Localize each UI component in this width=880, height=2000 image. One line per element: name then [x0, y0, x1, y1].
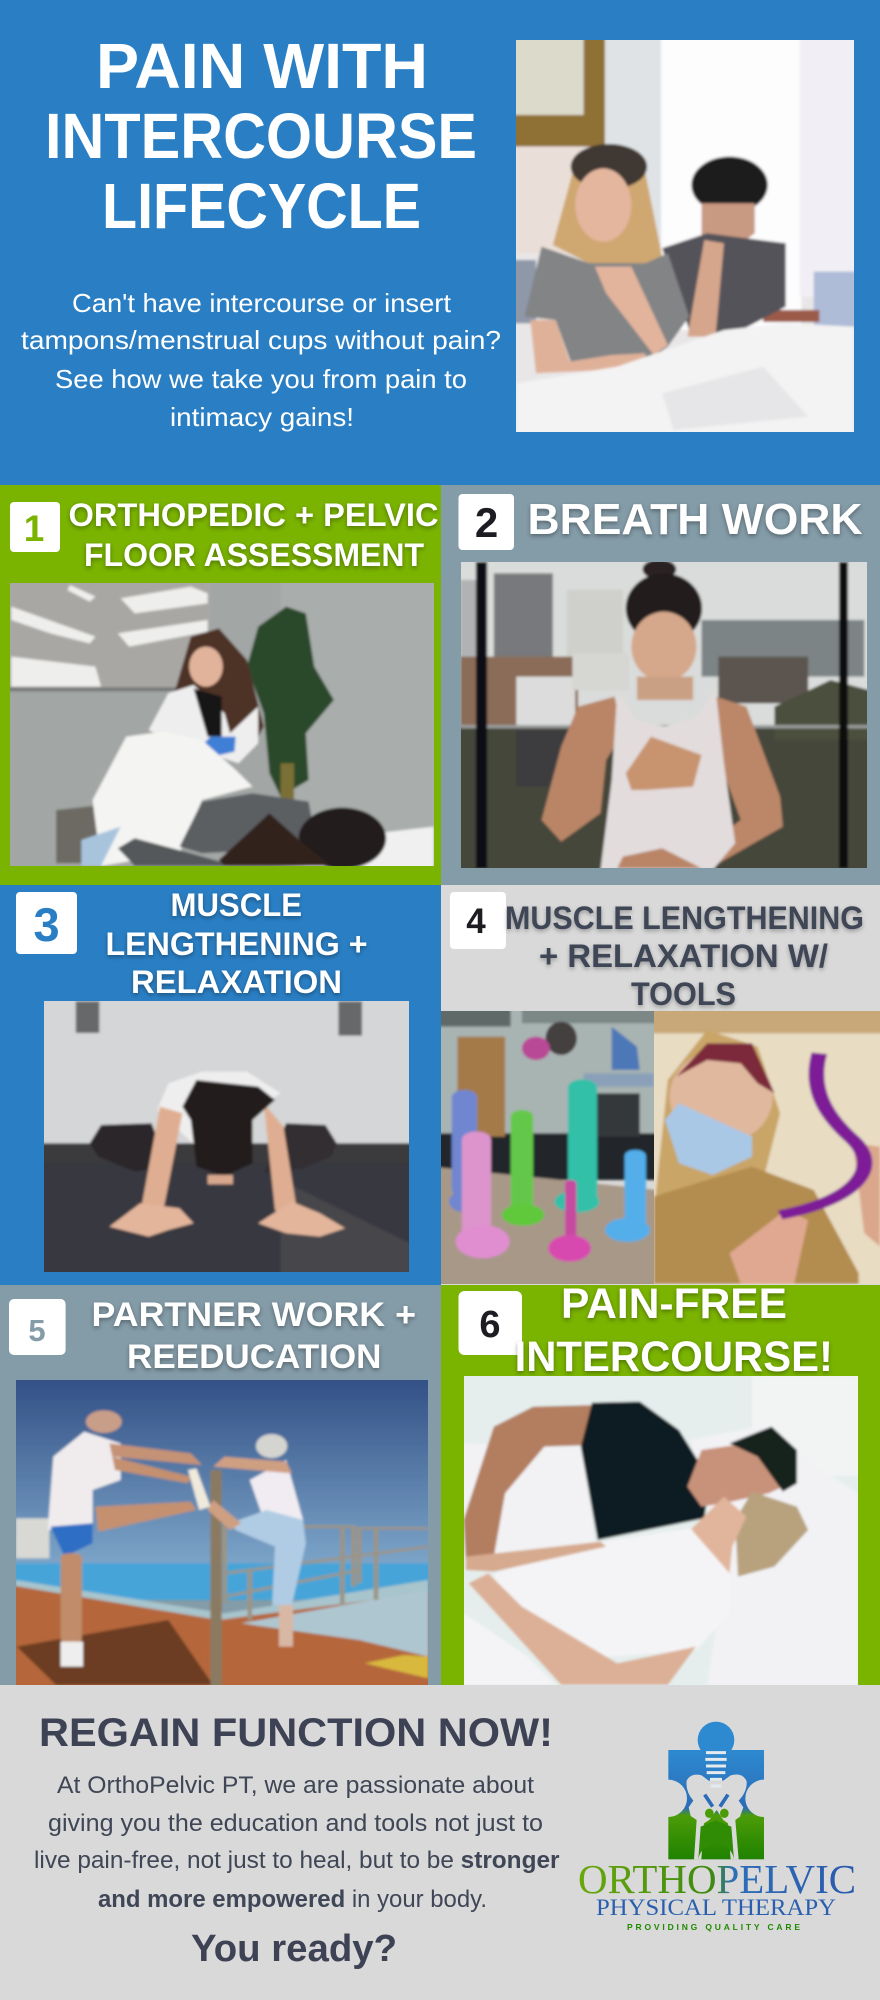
- heading: step 6: PAIN-FREE: [561, 1280, 787, 1328]
- heading: step 5: PARTNER WORK +: [92, 1296, 416, 1334]
- step number 2: [458, 494, 514, 550]
- heading: step 1: ORTHOPEDIC + PELVIC: [68, 497, 438, 533]
- step number 2: 2: [475, 499, 498, 546]
- intro text: intimacy gains!: [170, 402, 354, 432]
- logo subtitle: PHYSICAL THERAPY: [596, 1895, 836, 1920]
- title: INTERCOURSE: [45, 100, 477, 172]
- photo: couple in bed: [516, 40, 854, 432]
- body text: giving you the education and tools not just to: [48, 1810, 543, 1837]
- body text: [34, 1772, 560, 1913]
- title: [45, 30, 477, 242]
- intro text: [21, 288, 501, 432]
- photo: dilators: [441, 1011, 654, 1284]
- step number 4: 4: [466, 902, 486, 941]
- step number 1: 1: [24, 508, 44, 549]
- heading: step 3: [106, 887, 368, 1000]
- intro text: tampons/menstrual cups without pain?: [21, 325, 501, 355]
- body text: At OrthoPelvic PT, we are passionate about: [57, 1772, 534, 1799]
- heading: step 1: [68, 497, 438, 573]
- panel: header: [0, 0, 880, 485]
- heading: step 1: FLOOR ASSESSMENT: [84, 537, 424, 573]
- step number 5: 5: [28, 1313, 46, 1348]
- icon: pelvis puzzle piece: [650, 1722, 783, 1859]
- logo: [578, 1722, 856, 1932]
- heading: step 3: LENGTHENING +: [106, 926, 368, 962]
- photo: couple stretching: [16, 1380, 428, 1685]
- panel: step 1: [0, 485, 455, 885]
- panel: step 3: [0, 885, 441, 1285]
- photo: clinician assessing patient: [10, 583, 434, 866]
- step number 3: 3: [34, 898, 60, 951]
- panel: footer: [0, 1685, 880, 2000]
- call to action: You ready?: [191, 1928, 397, 1970]
- logo tagline: PROVIDING QUALITY CARE: [627, 1922, 800, 1932]
- step number 6: 6: [479, 1304, 501, 1346]
- panel: step 5: [0, 1285, 449, 1693]
- heading: step 5: REEDUCATION: [127, 1338, 382, 1376]
- step number 4: [450, 892, 506, 949]
- heading: step 3: MUSCLE: [170, 887, 302, 923]
- step number 1: [10, 502, 60, 552]
- panel: step 4: [432, 885, 880, 1290]
- heading: step 6: INTERCOURSE!: [515, 1333, 833, 1381]
- heading: step 2: BREATH WORK: [528, 495, 863, 544]
- intro text: Can't have intercourse or insert: [72, 288, 452, 318]
- photo: child's pose stretch: [44, 1001, 409, 1272]
- panel: step 6: [441, 1280, 880, 1693]
- heading: step 4: TOOLS: [631, 976, 736, 1012]
- step number 3: [16, 892, 77, 954]
- heading: regain function: REGAIN FUNCTION NOW!: [39, 1711, 553, 1755]
- step number 6: [458, 1291, 522, 1355]
- body text: and more empowered in your body.: [98, 1886, 487, 1913]
- heading: step 5: [92, 1296, 416, 1376]
- step number 5: [9, 1299, 66, 1355]
- heading: step 6: [515, 1280, 833, 1381]
- photo: happy couple in bed: [464, 1376, 858, 1685]
- heading: step 4: MUSCLE LENGTHENING: [505, 900, 864, 936]
- photo: woman with curved dilator: [645, 1007, 880, 1290]
- panel: step 2: [441, 485, 880, 885]
- intro text: See how we take you from pain to: [55, 364, 467, 394]
- title: LIFECYCLE: [102, 170, 421, 242]
- photo: woman breathing: [461, 562, 867, 868]
- logo wordmark: ORTHOPELVIC: [578, 1856, 856, 1902]
- heading: step 4: [505, 900, 864, 1012]
- title: PAIN WITH: [96, 30, 428, 102]
- body text: live pain-free, not just to heal, but to be stronger: [34, 1847, 560, 1874]
- heading: step 4: + RELAXATION W/: [539, 938, 828, 974]
- heading: step 3: RELAXATION: [131, 964, 342, 1000]
